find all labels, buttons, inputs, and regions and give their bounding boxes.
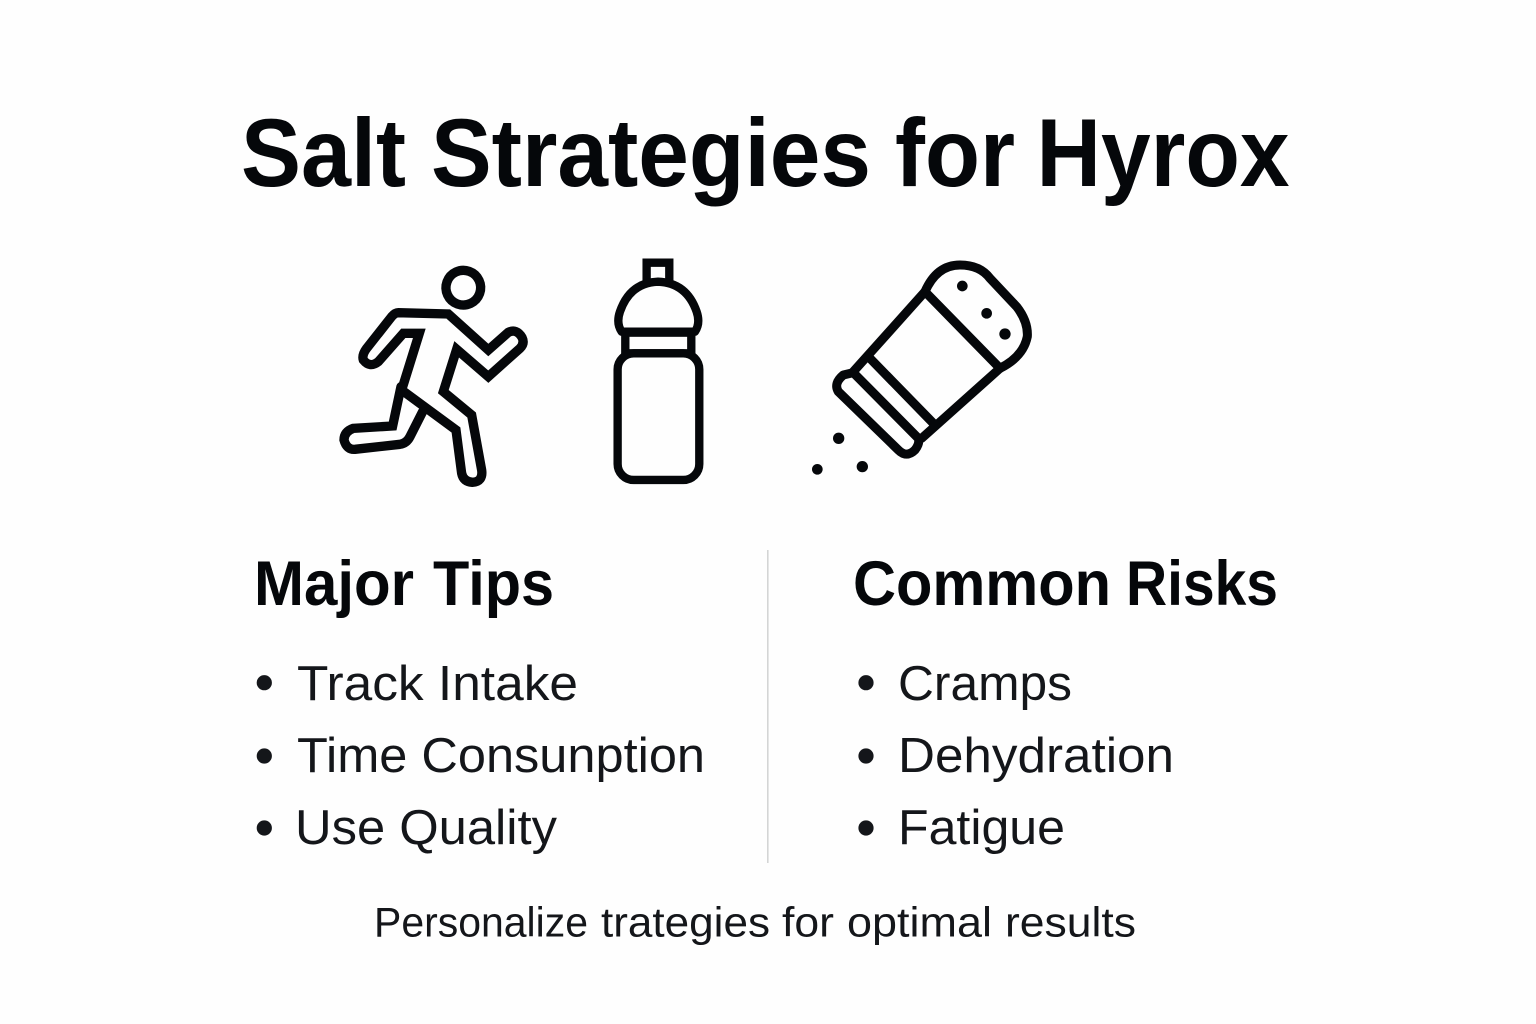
heading: major tips: Major — [254, 549, 414, 619]
list item: fatigue: Fatigue — [898, 801, 1065, 855]
title: for — [895, 99, 1015, 207]
list item: track intake: Track Intake — [297, 657, 578, 711]
shaker outline — [837, 265, 1027, 454]
title: Strategies — [431, 99, 871, 207]
panel: common risks — [853, 549, 1278, 855]
bottle body — [618, 353, 699, 480]
icon: runner — [344, 265, 523, 482]
title: Hyrox — [1036, 99, 1290, 207]
icon: salt shaker — [812, 265, 1027, 475]
heading: common risks: Risks — [1126, 549, 1278, 619]
title: Salt — [241, 99, 406, 207]
runner rear leg — [344, 387, 423, 449]
footer note: results — [1005, 898, 1136, 946]
footer note: Personalize — [374, 898, 588, 946]
icon: water bottle — [618, 263, 699, 480]
list item: cramps: Cramps — [898, 657, 1072, 711]
list item: use quality: Use Quality — [295, 801, 558, 855]
footer note: for — [782, 898, 834, 946]
list item: time consumption: Time Consunption — [297, 729, 705, 783]
footer note: optimal — [847, 898, 992, 946]
footer note: trategies — [601, 898, 770, 946]
list item: dehydration: Dehydration — [898, 729, 1174, 783]
runner body — [363, 313, 523, 482]
salt holes and grains — [812, 281, 1011, 475]
bottle cap — [647, 263, 669, 282]
bottle dome — [618, 282, 698, 332]
panel: major tips — [254, 549, 705, 855]
bottle neck band — [625, 333, 691, 353]
heading: major tips: Tips — [433, 549, 554, 619]
heading: common risks: Common — [853, 549, 1111, 619]
runner head — [441, 265, 486, 310]
